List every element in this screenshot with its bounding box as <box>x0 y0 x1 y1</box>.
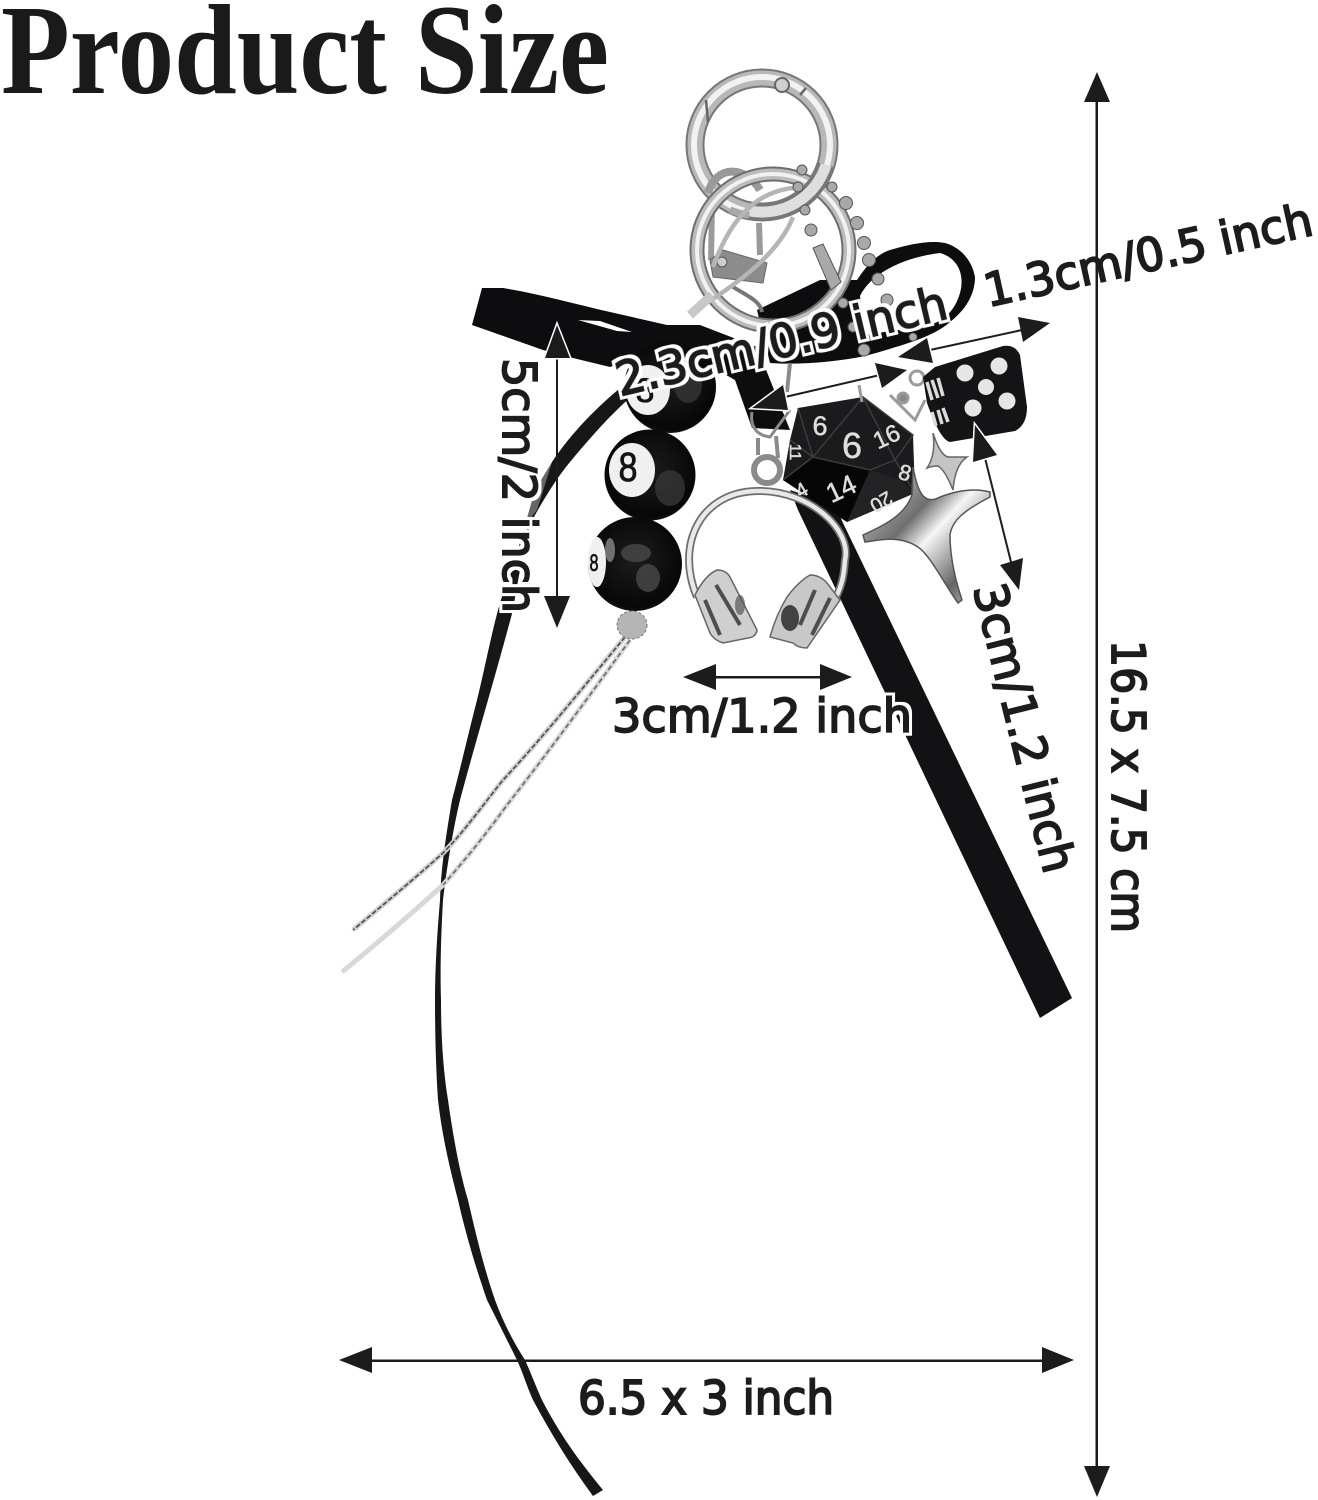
connector links <box>859 371 925 420</box>
d20 die <box>783 397 915 522</box>
arrow: headphones width <box>683 664 852 690</box>
key ring <box>697 174 849 326</box>
d20 die: 4 <box>792 478 812 503</box>
label: 5cm/2 inch: 5cm/2 inch <box>492 358 546 613</box>
tassel threads <box>342 637 630 972</box>
thin ribbon tail <box>435 384 632 1496</box>
headband <box>689 491 846 597</box>
d20 die: 14 <box>821 469 861 509</box>
arrow: overall width <box>339 1347 1074 1373</box>
right ear cup <box>770 575 840 648</box>
bead bottom: 8 <box>590 550 598 577</box>
d20 die: 16 <box>869 419 905 455</box>
headphones charm <box>689 491 846 648</box>
arrow: 8-ball length <box>544 325 570 628</box>
right bow loop <box>757 242 975 364</box>
gate rivet <box>775 78 789 92</box>
side pips <box>927 378 948 426</box>
bead top <box>624 341 716 433</box>
bead middle <box>604 430 696 520</box>
d20 die: 6 <box>812 411 828 441</box>
label: 6.5 x 3 inch: 6.5 x 3 inch <box>578 1371 834 1425</box>
label: 3cm/1.2 inch diagonal: 3cm/1.2 inch <box>962 578 1086 878</box>
left bow loop <box>472 288 790 430</box>
small star charm <box>927 433 967 490</box>
arrow: d20 width <box>752 363 907 410</box>
bead middle: 8 <box>618 444 638 490</box>
label: 3cm/1.2 inch horizontal: 3cm/1.2 inch <box>612 689 912 743</box>
d20 die: 6 <box>842 425 862 466</box>
label: 1.3cm/0.5 inch: 1.3cm/0.5 inch <box>979 193 1317 318</box>
hook and chain above headphones <box>752 363 790 483</box>
8-ball beads <box>588 341 716 611</box>
silver cord loop <box>690 188 793 315</box>
label: 16.5 x 7.5 cm: 16.5 x 7.5 cm <box>1101 640 1155 933</box>
pips <box>956 358 1016 416</box>
top ring front arc <box>750 165 826 212</box>
large star charm <box>863 467 990 603</box>
wide ribbon tail <box>790 490 1072 1018</box>
bead bottom <box>588 517 682 611</box>
label: 2.3cm/0.9 inch: 2.3cm/0.9 inch <box>610 276 952 407</box>
loop ring <box>754 457 780 483</box>
d20 die: 20 <box>866 486 896 516</box>
lobster clasp <box>708 170 800 312</box>
left ear cup <box>695 570 757 643</box>
ribbon bow <box>472 242 975 430</box>
tassel knot <box>617 611 647 639</box>
arrow: star height <box>973 425 1023 590</box>
arrow: overall height <box>1084 72 1110 1497</box>
d20 die: 11 <box>786 444 803 460</box>
top spring ring <box>694 77 830 213</box>
bead top: 8 <box>636 372 654 410</box>
tassel <box>342 611 647 972</box>
d20 die: 8 <box>896 459 914 486</box>
cube die <box>923 346 1027 442</box>
ball chains <box>793 165 917 356</box>
arrow: cube die width <box>898 317 1050 363</box>
